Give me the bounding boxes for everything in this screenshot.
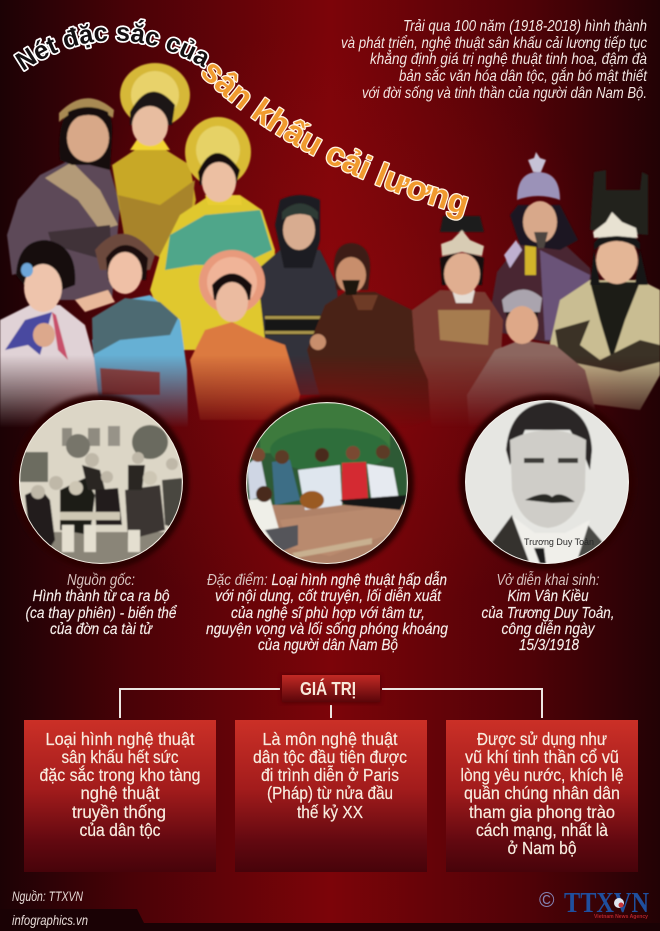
- logo: TTXVN: TTXVN: [564, 888, 649, 919]
- caption: founding play: của Trương Duy Toản,: [482, 605, 614, 622]
- logo: TTXVN: ©: [539, 889, 555, 912]
- caption: founding play: [482, 570, 614, 654]
- intro text: [341, 18, 647, 102]
- caption: founding play: 15/3/1918: [519, 637, 579, 654]
- cast of performers: [0, 63, 660, 440]
- source text: Nguồn: TTXVN: [12, 888, 84, 904]
- photo: portrait of Trương Duy Toản: [459, 394, 635, 570]
- panel: value one: đặc sắc trong kho tàng: [40, 764, 200, 785]
- panel: value two: Là môn nghệ thuật: [262, 729, 398, 749]
- footer band: [0, 909, 660, 931]
- panel: value three: lòng yêu nước, khích lệ: [460, 765, 624, 785]
- performer: woman in dark cap: [257, 195, 340, 395]
- caption: characteristics: của nghệ sĩ phù hợp với tâm tư,: [231, 605, 425, 622]
- panel: value one: của dân tộc: [80, 820, 161, 840]
- performer: helmeted general: [491, 152, 592, 344]
- caption: origin: [26, 572, 177, 638]
- performer: woman in white with blue scarf: [0, 240, 100, 430]
- panel: value three: ở Nam bộ: [508, 838, 576, 858]
- caption: origin: (ca thay phiên) - biến thể: [26, 604, 177, 622]
- caption: characteristics: [206, 570, 448, 654]
- panel: value one: [24, 720, 216, 872]
- performer: man in brown: [307, 243, 430, 430]
- performer: woman in orange: [190, 250, 300, 420]
- caption: founding play: Kim Vân Kiều: [508, 588, 589, 605]
- website text: infographics.vn: [12, 912, 88, 928]
- panel: value three: quần chúng nhân dân: [464, 783, 620, 803]
- photo: early troupe: [13, 394, 189, 570]
- heading: value: [282, 675, 380, 703]
- panel: value three: tham gia phong trào: [469, 802, 615, 822]
- panel: value one: truyền thống: [72, 802, 166, 822]
- photo: portrait of Trương Duy Toản: Trương Duy Toản: [524, 537, 594, 548]
- heading: value: GIÁ TRỊ: [300, 678, 356, 699]
- panel: value two: thế kỷ XX: [297, 802, 363, 822]
- performer: queen in green and yellow: [150, 117, 275, 350]
- panel: value three: Được sử dụng như: [477, 729, 607, 749]
- caption: origin: của đờn ca tài tử: [50, 621, 154, 638]
- logo: TTXVN: Vietnam News Agency: [594, 914, 649, 920]
- panel: value two: đi trình diễn ở Paris: [261, 764, 399, 785]
- caption: characteristics: của người dân Nam Bộ: [258, 637, 398, 654]
- performer: boy in mauve robe: [466, 288, 595, 418]
- panel: value two: [235, 720, 427, 872]
- panel: value three: cách mạng, nhất là: [476, 820, 608, 840]
- performer: man in horned hat: [547, 170, 660, 410]
- panel: value one: nghệ thuật: [80, 783, 160, 803]
- title: second line: sân khấu cải lương: [201, 62, 469, 221]
- photo: musicians on a mat: [240, 396, 414, 570]
- title: first line: Nét đặc sắc của: [13, 18, 210, 72]
- caption: origin: Hình thành từ ca ra bộ: [32, 588, 170, 605]
- panel: value two: (Pháp) từ nửa đầu: [267, 783, 393, 803]
- caption: characteristics: nguyện vọng và lối sống phóng khoáng: [206, 621, 448, 638]
- logo: TTXVN: [539, 888, 649, 920]
- panel: value one: sân khấu hết sức: [62, 747, 179, 767]
- caption: founding play: Vở diễn khai sinh:: [496, 570, 600, 589]
- performer: man in red robe: [412, 216, 503, 440]
- panel: value three: vũ khí tinh thần cổ vũ: [465, 747, 619, 767]
- caption: founding play: công diễn ngày: [502, 619, 595, 638]
- connector lines: [120, 689, 542, 718]
- panel: value one: Loại hình nghệ thuật: [46, 729, 195, 749]
- performer: man in purple costume: [7, 98, 120, 300]
- caption: characteristics: với nội dung, cốt truyện, lối diễn xuất: [215, 586, 441, 605]
- caption: characteristics: Đặc điểm: Loại hình nghệ thuật hấp dẫn: [207, 570, 447, 589]
- performer: woman in light blue: [75, 234, 188, 430]
- panel: value two: dân tộc đầu tiên được: [253, 747, 407, 767]
- panel: value three: [446, 720, 638, 872]
- performer: queen with gold halo: [112, 63, 196, 260]
- caption: origin: Nguồn gốc:: [67, 572, 135, 589]
